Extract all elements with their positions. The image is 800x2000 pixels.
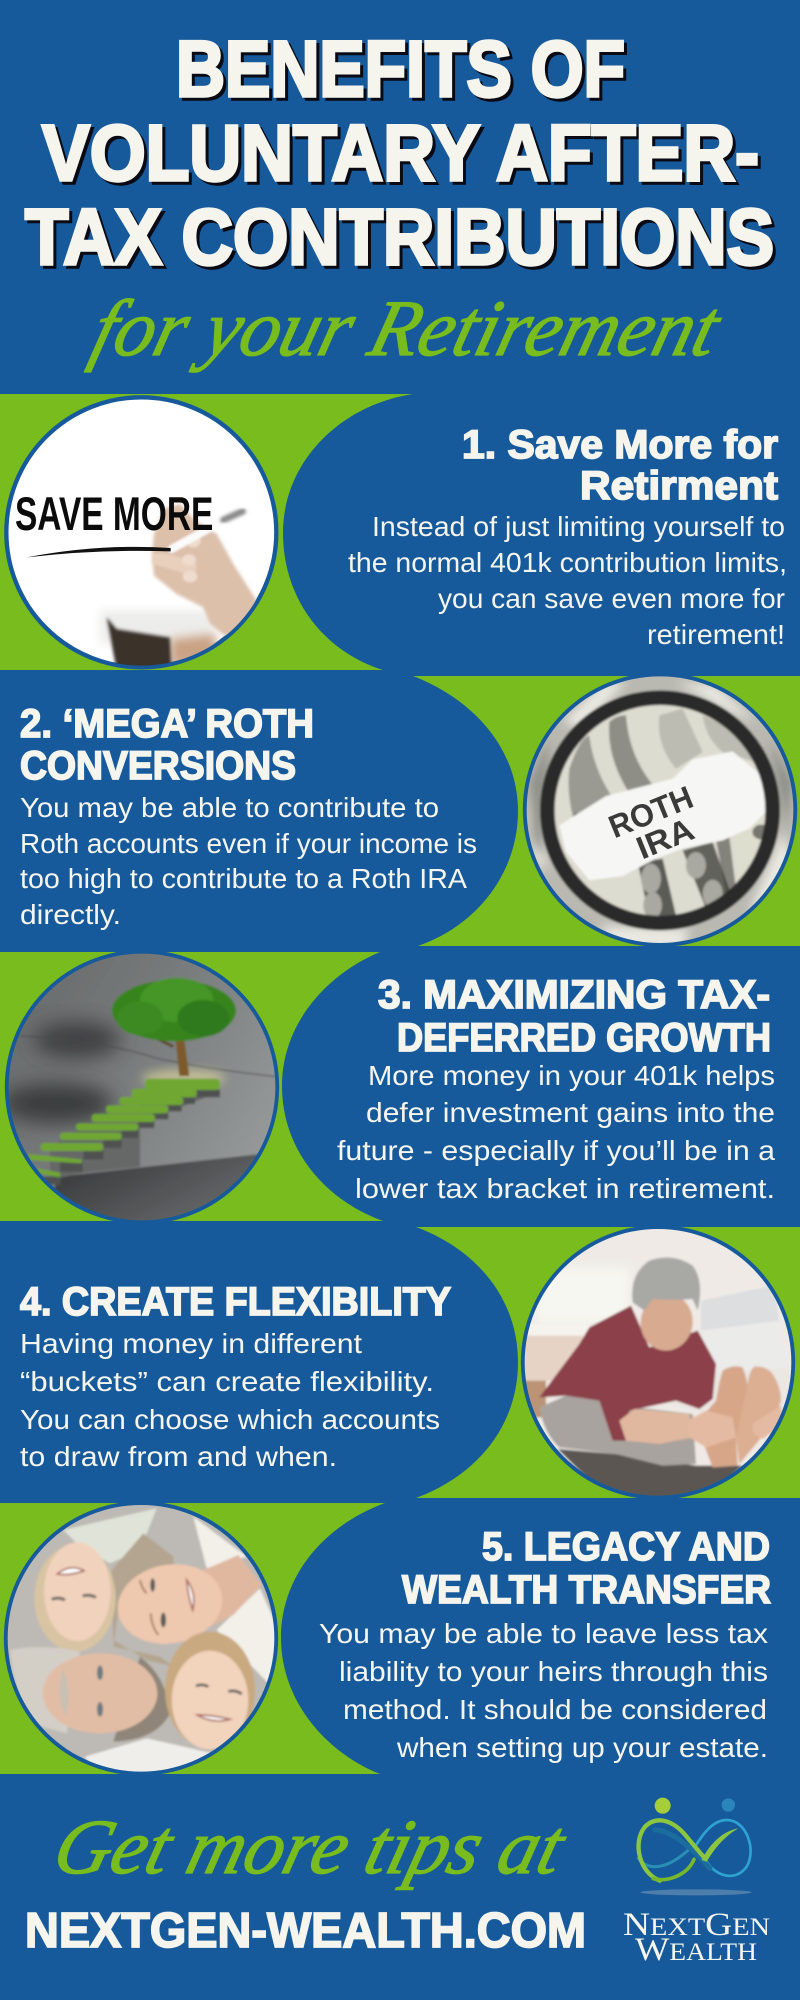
logo wordmark	[623, 1907, 770, 1968]
heading 1: 1. Save More for	[462, 423, 778, 467]
body 3: More money in your 401k helps	[368, 1060, 775, 1091]
title	[25, 24, 774, 281]
green band 2	[413, 676, 800, 946]
body 4: to draw from and when.	[20, 1441, 337, 1472]
body 1	[348, 511, 787, 650]
body 5: liability to your heirs through this	[339, 1656, 768, 1687]
photo: tree on stairs	[0, 950, 284, 1230]
green band 3	[0, 952, 383, 1221]
subtitle: for your Retirement	[83, 283, 732, 373]
heading 5	[402, 1525, 771, 1612]
body 1: Instead of just limiting yourself to	[372, 511, 785, 542]
label in photo: SAVE MORE	[15, 487, 213, 540]
body 1: the normal 401k contribution limits,	[348, 547, 787, 578]
body 5	[319, 1618, 768, 1763]
body 1: retirement!	[647, 619, 785, 650]
body 3: future - especially if you’ll be in a	[337, 1135, 775, 1166]
heading 5: WEALTH TRANSFER	[402, 1568, 771, 1612]
heading 2: 2. ‘MEGA’ ROTH	[20, 702, 314, 746]
label in photo: ROTH	[604, 779, 698, 845]
label in photo	[604, 779, 709, 873]
photo: save more	[6, 397, 276, 671]
body 1: you can save even more for	[438, 583, 785, 614]
heading 2	[20, 702, 314, 788]
heading 2: CONVERSIONS	[20, 744, 296, 788]
green band 1	[0, 394, 413, 670]
icon: infinity mark	[638, 1798, 752, 1895]
body 4	[20, 1328, 440, 1472]
photo: roth ira	[523, 672, 799, 949]
panel: 2 mega roth	[20, 672, 800, 949]
title: BENEFITS OF	[176, 24, 625, 113]
body 4: “buckets” can create flexibility.	[20, 1366, 434, 1397]
green band 5	[0, 1503, 385, 1774]
heading 3	[378, 973, 771, 1060]
footer script call to action: Get more tips at	[45, 1804, 575, 1891]
logo wordmark: NEXTGEN	[623, 1907, 770, 1943]
panel: 1 save more	[0, 394, 787, 671]
heading 4: 4. CREATE FLEXIBILITY	[20, 1280, 451, 1324]
body 2: too high to contribute to a Roth IRA	[20, 863, 467, 894]
logo wordmark: WEALTH	[635, 1932, 757, 1968]
heading 1: Retirment	[580, 464, 778, 508]
panel: 3 tax-deferred growth	[0, 950, 775, 1230]
body 2: directly.	[20, 899, 121, 930]
logo: nextgen wealth	[623, 1798, 770, 1968]
heading 3: 3. MAXIMIZING TAX-	[378, 973, 770, 1017]
body 5: method. It should be considered	[343, 1694, 767, 1725]
photo: family	[0, 1500, 284, 1780]
body 4: Having money in different	[20, 1328, 362, 1359]
body 5: You may be able to leave less tax	[319, 1618, 768, 1649]
body 2	[20, 792, 477, 930]
body 3: lower tax bracket in retirement.	[355, 1173, 775, 1204]
body 2: Roth accounts even if your income is	[20, 828, 477, 859]
heading 5: 5. LEGACY AND	[482, 1525, 770, 1569]
panel: 5 legacy	[0, 1500, 771, 1780]
label in photo: IRA	[631, 811, 699, 866]
green band 4	[416, 1227, 800, 1498]
body 5: when setting up your estate.	[396, 1732, 768, 1763]
body 3	[337, 1060, 775, 1204]
body 4: You can choose which accounts	[20, 1404, 440, 1435]
heading 1	[462, 423, 778, 508]
heading 3: DEFERRED GROWTH	[397, 1016, 771, 1060]
body 2: You may be able to contribute to	[20, 792, 439, 823]
photo: woman stretching	[516, 1224, 800, 1504]
panel: 4 create flexibility	[20, 1224, 800, 1504]
footer website: NEXTGEN-WEALTH.COM	[25, 1904, 586, 1958]
body 3: defer investment gains into the	[366, 1097, 775, 1128]
